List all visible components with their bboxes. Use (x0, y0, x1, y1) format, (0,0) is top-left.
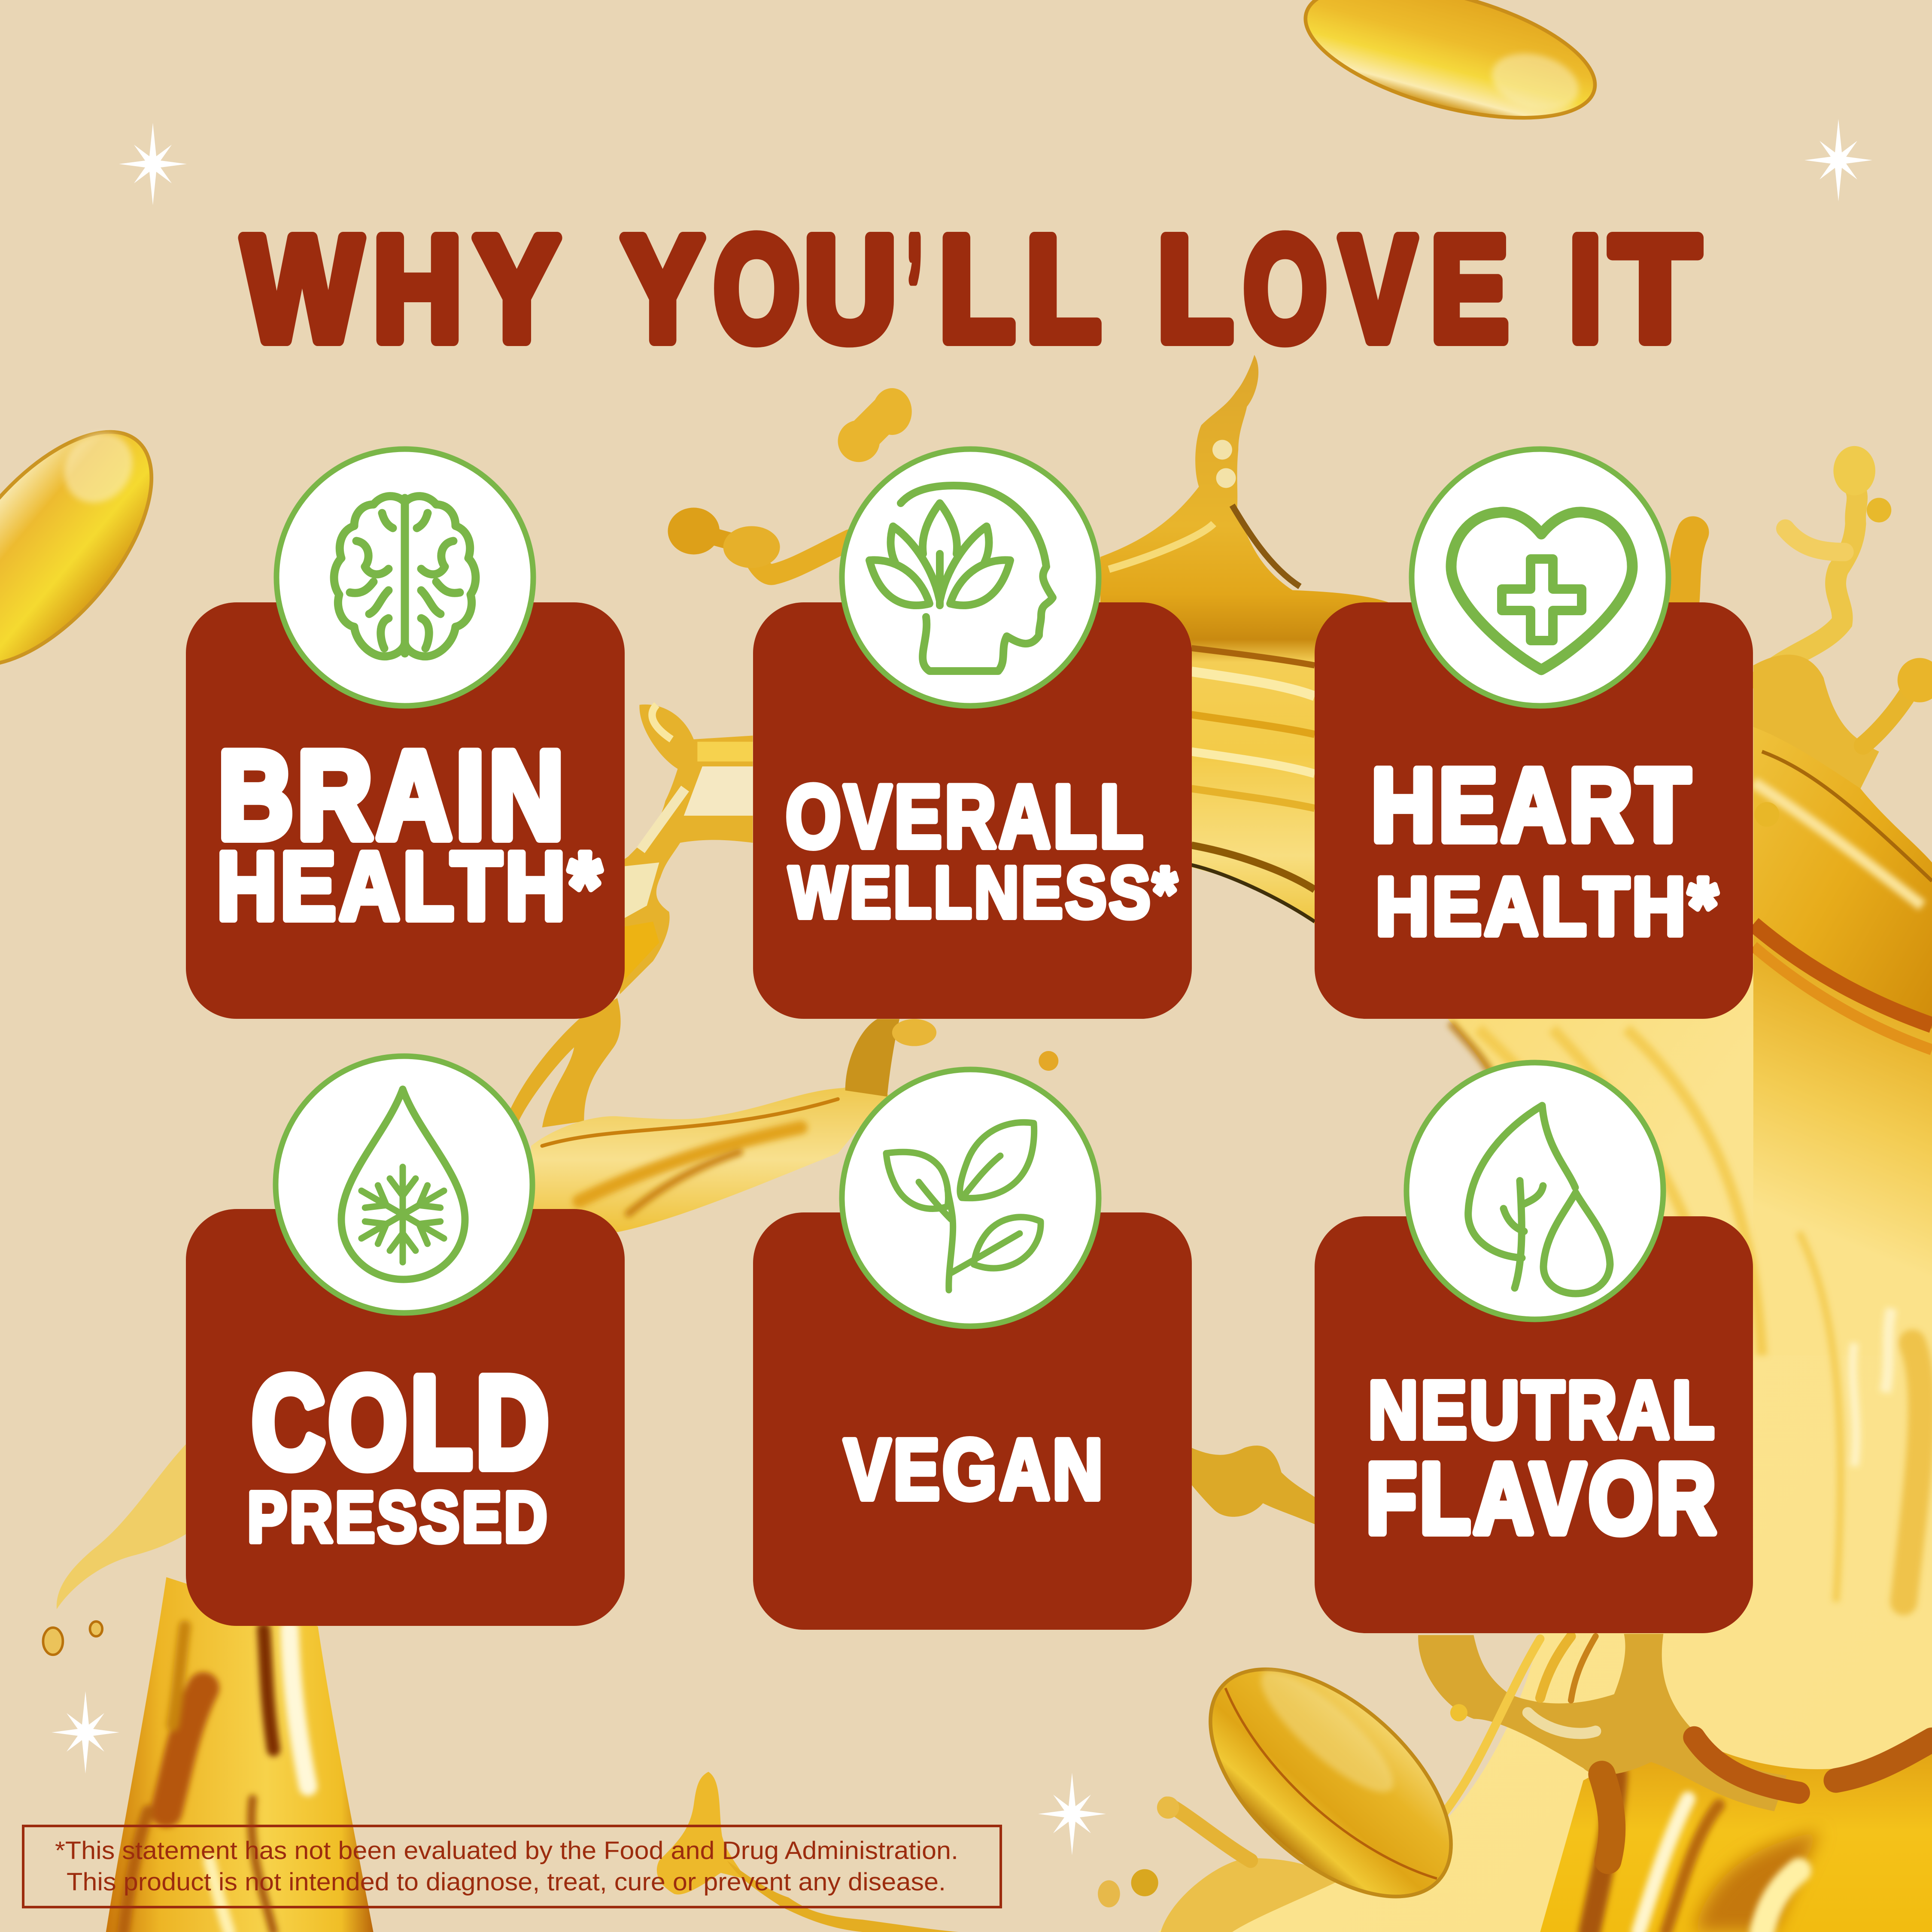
panel: neutral flavor (1315, 1063, 1753, 1633)
label: overall wellness (786, 767, 1179, 933)
card background (186, 602, 625, 1019)
card background (1315, 602, 1753, 1019)
label: cold pressed: PRESSED (247, 1477, 550, 1557)
oil: left column highlights (625, 705, 753, 980)
title: O (714, 206, 799, 372)
card background (753, 602, 1192, 1019)
label: heart health: HEALTH* (1376, 861, 1720, 952)
oil: upper right gold band (1753, 721, 1932, 1029)
oil: mid band under cards (531, 1087, 890, 1232)
oil: left column splash (620, 705, 753, 994)
label: brain health: BRAIN (218, 726, 568, 865)
oil: bean droplet (838, 388, 912, 462)
label: vegan: VEGAN (844, 1422, 1106, 1517)
label: overall wellness: WELLNESS* (789, 852, 1179, 933)
oil: mid column and droplet (845, 1019, 1058, 1097)
title: U (804, 206, 896, 372)
title: L (1157, 206, 1233, 372)
oil: bridge between lower cards (1191, 1446, 1315, 1524)
oil: bottom right lower gold (1540, 1730, 1932, 1932)
capsule: top (1292, 0, 1609, 144)
panel: brain health (186, 449, 625, 1019)
icon: brain (334, 496, 476, 656)
title: I (1569, 206, 1601, 372)
label: brain health (217, 726, 605, 940)
label: neutral flavor: FLAVOR (1366, 1443, 1719, 1554)
panel: heart health (1315, 449, 1753, 1019)
oil: mid band streaks (542, 1099, 838, 1214)
oil: orange streak band (1753, 752, 1932, 1050)
title: ’ (907, 206, 922, 372)
label: cold pressed: COLD (252, 1350, 553, 1495)
title: W (243, 206, 363, 372)
icon circle (842, 1069, 1099, 1326)
oil: right crown splash (1683, 446, 1932, 827)
oil: streaks in centre band (1109, 440, 1315, 922)
label: overall wellness: OVERALL (786, 767, 1146, 866)
icon: plant sprout (886, 1122, 1041, 1290)
title: Y (622, 206, 703, 372)
oil: bottom centre splash (657, 1772, 959, 1932)
title: Y (474, 206, 558, 372)
sparkle: bottom left (52, 1691, 119, 1774)
oil: bottom right textured crown (1418, 1634, 1786, 1811)
icon: drop with snowflake (341, 1089, 465, 1279)
oil: right pale mass (1158, 912, 1932, 1932)
oil: bottom right highlights (1589, 1774, 1799, 1932)
icon: heart with cross (1451, 512, 1632, 670)
oil: orange ring bands (1435, 1636, 1932, 1861)
oil: gold fade under right band (1753, 924, 1932, 1355)
oil: waterfall streaks (123, 1626, 308, 1932)
card background (186, 1209, 625, 1626)
label: brain health: HEALTH* (217, 832, 605, 940)
title: E (1431, 206, 1508, 372)
title: L (1026, 206, 1098, 372)
title: L (939, 206, 1015, 372)
disclaimer box (23, 1826, 1001, 1907)
title: T (1611, 206, 1699, 372)
oil: waterfall (106, 1577, 374, 1932)
capsule: left (0, 396, 190, 700)
icon: leaf with drop (1468, 1106, 1610, 1294)
oil: bottom left splash near capsule (1098, 1796, 1355, 1932)
oil: left column tendrils (507, 998, 621, 1127)
icon: lotus head (869, 486, 1053, 671)
icon circle (1406, 1063, 1663, 1319)
label: neutral flavor (1366, 1365, 1719, 1554)
title: O (1244, 206, 1327, 372)
sparkle: top right (1804, 119, 1872, 201)
capsule: bottom (1170, 1627, 1492, 1932)
title: V (1340, 206, 1416, 372)
oil: pale streaks (1450, 1023, 1922, 1602)
sparkle: bottom centre (1038, 1773, 1106, 1855)
card background (1315, 1216, 1753, 1633)
label: cold pressed (247, 1350, 553, 1557)
title: H (373, 206, 462, 372)
oil: left droplets (43, 1622, 102, 1655)
oil: centre band between top cards (1100, 355, 1392, 924)
icon circle (842, 449, 1099, 706)
oil: left drip arm (668, 507, 850, 574)
card background (753, 1212, 1192, 1630)
panel: cold pressed (186, 1056, 625, 1626)
icon circle (276, 449, 533, 706)
sparkle: top left (119, 123, 187, 205)
disclaimer box: This product is not intended to diagnose, treat, cure or prevent any disease. (67, 1868, 946, 1896)
label: neutral flavor: NEUTRAL (1368, 1365, 1717, 1455)
label: heart health (1371, 747, 1720, 952)
icon circle (1412, 449, 1668, 706)
label: heart health: HEART (1371, 747, 1694, 863)
disclaimer box: *This statement has not been evaluated by the Food and Drug Administration. (55, 1837, 958, 1865)
oil: left swoop (57, 1444, 186, 1609)
icon circle (276, 1056, 532, 1313)
panel: vegan (753, 1069, 1192, 1630)
panel: overall wellness (753, 449, 1192, 1019)
oil: bottom right dark patch (1694, 1831, 1820, 1932)
